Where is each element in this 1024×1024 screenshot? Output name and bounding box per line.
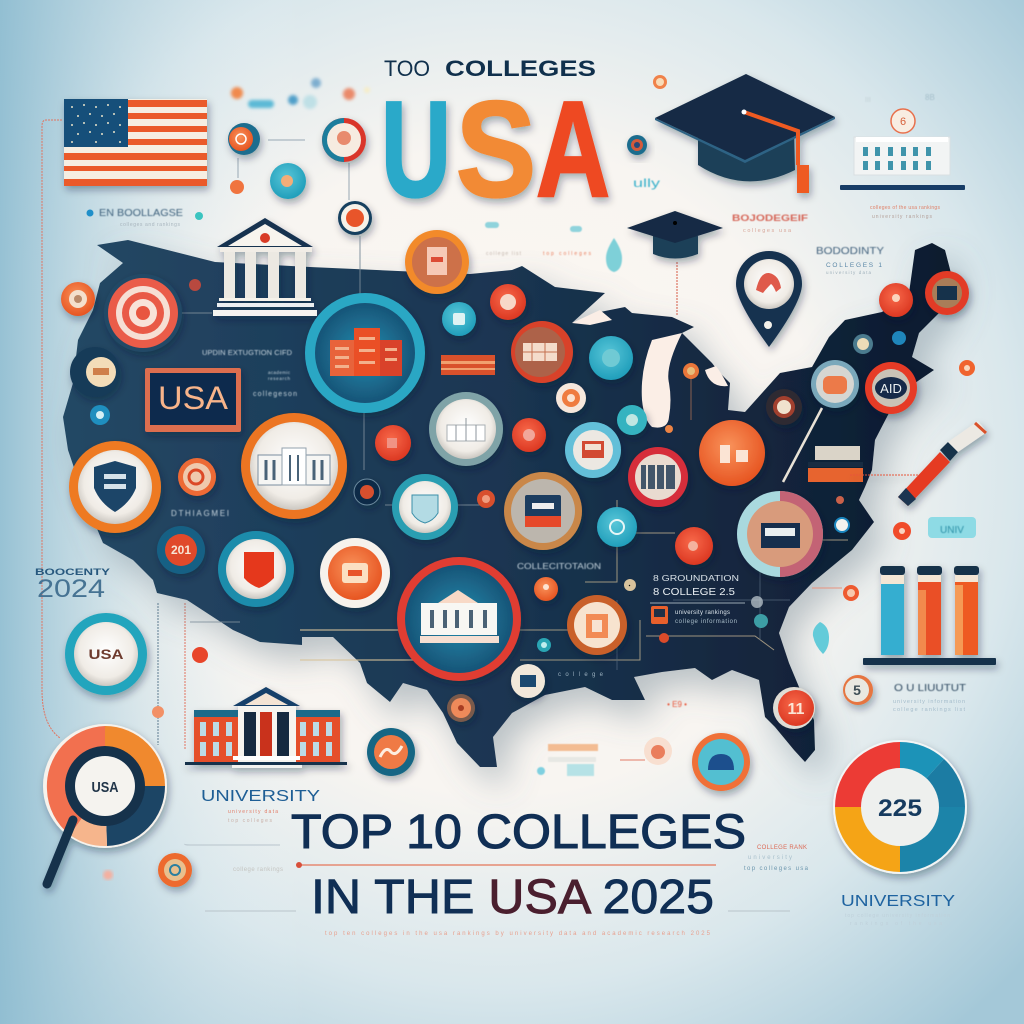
magnifier pie chart: USA bbox=[92, 779, 119, 796]
magnifier pie chart bbox=[43, 724, 167, 884]
icon: badge teal bbox=[270, 163, 306, 199]
badge: blue ring magnifier bbox=[811, 360, 859, 408]
badge: orange teal lower left bbox=[158, 853, 192, 887]
title: USA big letters bbox=[381, 73, 610, 225]
icon: small orange badge bbox=[653, 75, 667, 89]
label: blue caption: university data bbox=[826, 270, 871, 275]
map labels west: UPDIN EXTUGTION CIFD bbox=[202, 348, 293, 357]
small icons east coast bbox=[812, 585, 873, 705]
side caption right of title: COLLEGE RANK bbox=[757, 845, 807, 851]
label: university right bbox=[841, 893, 955, 927]
badge: orange swirl bbox=[178, 458, 216, 496]
badge: peach icon bbox=[620, 737, 672, 765]
badge: teal orange ring bbox=[692, 733, 750, 791]
label: university right: top college university information bbox=[845, 913, 950, 919]
small icons top left bbox=[228, 118, 372, 235]
badge: white ring orange bbox=[320, 538, 390, 608]
usa map bbox=[63, 240, 952, 767]
badge: large teal red ring east bbox=[737, 491, 823, 577]
badge: tan ring book bbox=[504, 472, 582, 550]
side caption right of title: top colleges usa bbox=[744, 866, 809, 872]
icon: red flower bbox=[477, 490, 495, 508]
badge: white orange bbox=[556, 383, 586, 413]
badge: florida red bbox=[773, 687, 815, 729]
pie chart 225 bbox=[833, 740, 967, 874]
badge: grey small bbox=[853, 334, 873, 354]
badge: teal dot lower bbox=[537, 638, 551, 652]
icon: college building bbox=[185, 687, 347, 768]
badge: teal lake bbox=[617, 405, 647, 435]
bar chart bbox=[863, 566, 996, 665]
badge: orange west coast bbox=[61, 282, 95, 316]
badge: big red ring white building bbox=[397, 557, 521, 681]
icon: badge red white bbox=[322, 118, 366, 162]
icon: orange ring connector bbox=[812, 585, 859, 601]
small dots lower left bbox=[152, 647, 208, 718]
faint labels under USA: top colleges bbox=[543, 251, 592, 257]
badge: orange northeast bbox=[879, 283, 913, 317]
label: university right: rankings of the usa bbox=[850, 921, 942, 927]
title: USA big letters: A bbox=[536, 73, 610, 225]
map badges east bbox=[665, 271, 975, 532]
badge: teal small bbox=[442, 302, 476, 336]
badge: red dot two bbox=[512, 418, 546, 452]
bar: orange middle bbox=[917, 566, 942, 655]
footer caption: top ten colleges in the usa rankings by university data and academic research 2025 bbox=[325, 931, 711, 937]
icon: graduation cap large bbox=[655, 74, 835, 193]
title divider: college rankings bbox=[233, 867, 283, 873]
bar: orange right bbox=[954, 566, 979, 655]
badge: usa teal ring: USA bbox=[88, 646, 124, 662]
badge: teal dot bbox=[90, 405, 110, 425]
central map text panel: college information bbox=[675, 619, 737, 625]
title: USA big letters: U bbox=[381, 73, 451, 225]
title: USA big letters: S bbox=[456, 73, 536, 225]
central map text panel: university rankings bbox=[675, 610, 730, 616]
badge: orange small central bbox=[534, 577, 558, 601]
title: in the usa 2025: IN THE USA 2025 bbox=[311, 871, 714, 924]
badge: florida red: 11 bbox=[788, 701, 805, 718]
badge: number five: 5 bbox=[853, 682, 861, 698]
map labels west: collegeson bbox=[253, 391, 297, 398]
label: right caption: O U LIUUTUT bbox=[894, 683, 966, 694]
badge: orange ring peach bbox=[405, 230, 469, 294]
badge: small orange michigan bbox=[683, 363, 699, 420]
icon: graduation cap small bbox=[627, 211, 723, 258]
badge: usa teal ring bbox=[65, 613, 147, 695]
label: blue caption bbox=[816, 246, 884, 275]
label: college caption top left bbox=[86, 208, 203, 228]
great lakes bbox=[572, 310, 728, 428]
central map text panel: college bbox=[558, 672, 604, 678]
central map text panel bbox=[517, 561, 768, 678]
label: university left: UNIVERSITY bbox=[201, 788, 320, 805]
usa sign: USA bbox=[158, 380, 229, 416]
label: college caption top left: EN BOOLLAGSE bbox=[99, 208, 183, 219]
label: red caption: colleges usa bbox=[743, 228, 792, 234]
icon: location drop bbox=[835, 496, 849, 532]
label: blue caption: COLLEGES 1 bbox=[826, 262, 882, 269]
badge: red ring building bbox=[628, 447, 688, 507]
icon: badge navy orange bbox=[228, 123, 260, 155]
shelf bbox=[863, 658, 996, 665]
badge: red ring navy: AID bbox=[880, 381, 902, 396]
gulf coast labels bbox=[537, 700, 750, 791]
icon: small college building top right: university rankings bbox=[872, 214, 932, 220]
label: university left: university data bbox=[228, 809, 278, 815]
badge: concentric red bbox=[104, 274, 182, 352]
badge: big orange ring building bbox=[241, 413, 347, 519]
side caption right of title: university bbox=[748, 855, 792, 861]
teal tag and red dot: UNIV bbox=[940, 525, 964, 536]
badge: grey ring white building bbox=[429, 392, 503, 466]
icon: small navy badge bbox=[627, 135, 647, 155]
central map text panel: COLLECITOTAION bbox=[517, 561, 601, 571]
badge: orange texas bbox=[447, 694, 475, 722]
icon: small orange dot ocean bbox=[959, 360, 975, 376]
badge: small red bbox=[189, 279, 201, 291]
map connector lines bbox=[180, 236, 848, 670]
badge: blue ring bbox=[565, 422, 621, 478]
side caption right of title bbox=[744, 845, 809, 872]
icon: small college building top right: colleges of the usa rankings bbox=[870, 205, 940, 211]
badge: red dot bbox=[375, 425, 411, 461]
badge: red ring navy bbox=[865, 362, 917, 414]
label: left caption 2024: 2024 bbox=[37, 575, 105, 603]
icon: teal drop bbox=[813, 622, 829, 654]
pie chart 225: 225 bbox=[878, 795, 922, 822]
teal tag and red dot bbox=[893, 517, 976, 540]
map badges middle row bbox=[69, 413, 823, 729]
icon: small orange dot bbox=[230, 180, 244, 194]
books bbox=[808, 446, 863, 482]
header: top colleges bbox=[384, 56, 596, 81]
magnifier stick bbox=[783, 408, 822, 482]
bar: teal bbox=[880, 566, 905, 655]
map labels west bbox=[171, 348, 297, 518]
badge: red small bbox=[490, 284, 526, 320]
badge: navy cream bbox=[70, 347, 120, 397]
label: university right: UNIVERSITY bbox=[841, 893, 955, 910]
icon: small orange dot lake bbox=[665, 425, 673, 433]
badge: red ring new england bbox=[925, 271, 969, 315]
icon: small college building top right: 6 bbox=[900, 116, 906, 128]
badge: white small navy bbox=[511, 664, 545, 698]
badge: teal ring shield bbox=[392, 474, 458, 540]
faint labels under USA bbox=[485, 222, 622, 272]
badge: orange red building bbox=[511, 321, 573, 383]
icon: badge navy ring bbox=[338, 201, 372, 235]
label: university left: top colleges bbox=[228, 818, 272, 824]
central map text panel: 8 COLLEGE 2.5 bbox=[653, 587, 735, 598]
badge: orange big bbox=[699, 420, 765, 486]
header: top colleges: COLLEGES bbox=[445, 56, 596, 81]
icon: temple building bbox=[213, 218, 317, 316]
decorative faint icons top bbox=[231, 78, 370, 109]
label: university left bbox=[201, 788, 320, 824]
label: right caption bbox=[893, 683, 966, 713]
badge: navy small red bbox=[354, 479, 380, 505]
label: right caption: college rankings list bbox=[893, 707, 965, 713]
faint labels under USA: college list bbox=[486, 251, 522, 257]
title divider bbox=[233, 862, 716, 873]
icon: faint red dot bbox=[103, 870, 113, 880]
map labels west: DTHIAGMEI bbox=[171, 509, 229, 518]
icon: small college building top right: III bbox=[865, 97, 871, 104]
striped tag bbox=[441, 355, 495, 375]
badge: teal mid bbox=[597, 507, 637, 547]
label: blue caption: BODODINTY bbox=[816, 246, 884, 257]
label: college caption top left: colleges and rankings bbox=[120, 222, 180, 228]
map badges west bbox=[61, 274, 201, 425]
map badges central bbox=[375, 230, 765, 507]
central map text panel: 8 GROUNDATION bbox=[653, 573, 739, 583]
label: left caption 2024: BOOCENTY bbox=[35, 567, 110, 577]
small icons near cap bbox=[627, 75, 667, 190]
badge: shield orange ring bbox=[69, 441, 161, 533]
label: red caption bbox=[732, 213, 808, 234]
badge: navy small bbox=[766, 389, 802, 425]
label: left caption 2024 bbox=[35, 567, 110, 603]
icon: paint marker bbox=[850, 421, 987, 506]
icon: blue dot bbox=[892, 331, 906, 345]
badge: navy red text bbox=[157, 526, 205, 574]
usa sign bbox=[145, 368, 241, 432]
label: red caption: BOJODEGEIF bbox=[732, 213, 808, 224]
connector lines bbox=[42, 120, 677, 845]
map labels west: academic bbox=[268, 370, 291, 375]
header: top colleges: TOO bbox=[384, 56, 430, 81]
badge: teal ring red shield bbox=[218, 531, 294, 607]
map labels west: research bbox=[268, 376, 290, 381]
label: right caption: university information bbox=[893, 699, 965, 705]
badge: big teal with red building bbox=[305, 293, 425, 413]
map pin bbox=[736, 251, 802, 347]
badge: orange ring book bbox=[567, 595, 627, 655]
icon: small college building top right: 8B bbox=[925, 93, 935, 102]
label: blurred tag: ully bbox=[633, 176, 660, 190]
badge: teal bbox=[589, 336, 633, 380]
badge: navy red text: 201 bbox=[171, 543, 191, 557]
title: top 10 colleges: TOP 10 COLLEGES bbox=[291, 806, 746, 859]
badge: navy teal lower bbox=[367, 728, 415, 776]
icon: small college building top right bbox=[840, 93, 965, 220]
icon: american flag bbox=[64, 99, 207, 186]
badge: red orange dot bbox=[675, 527, 713, 565]
tag: red: • E9 • bbox=[667, 700, 687, 709]
